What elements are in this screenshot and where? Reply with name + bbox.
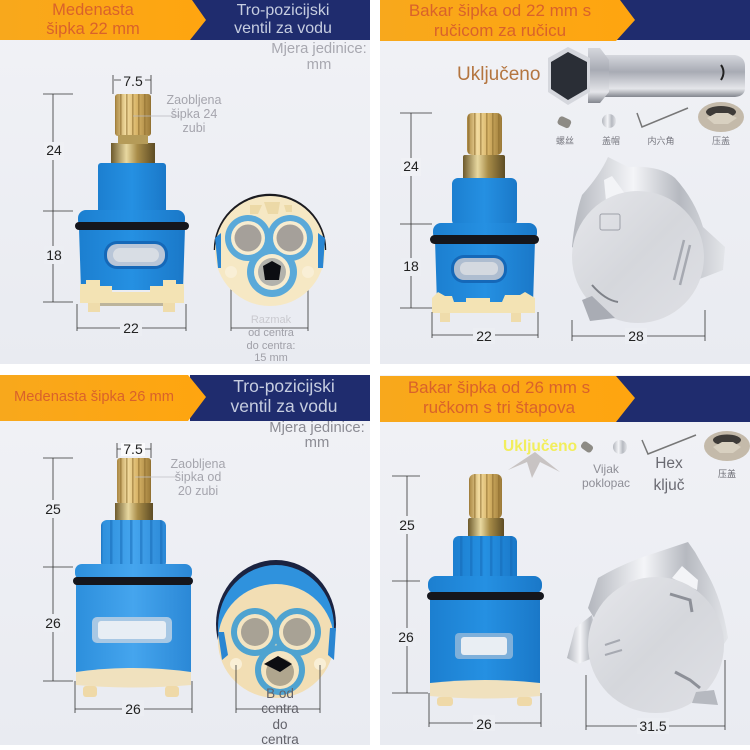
tooth note: Zaobljena	[167, 93, 221, 107]
panel: 22 mm with handle	[380, 0, 750, 364]
header banner: Medenasta šipka 26 mm	[14, 389, 174, 405]
unit note: mm	[307, 57, 331, 73]
dimension labels	[401, 158, 647, 344]
insect speck	[508, 452, 560, 478]
dimensions	[400, 113, 705, 341]
dimension labels: 25	[45, 501, 61, 517]
header banner: Bakar šipka od 26 mm s	[408, 378, 590, 397]
parts row: 压盖	[712, 135, 730, 146]
handle	[567, 542, 728, 713]
center distance note: do centra:	[247, 340, 295, 352]
header banner: ručicom za ručicu	[434, 21, 566, 40]
wrench	[548, 47, 745, 105]
valve bottom view	[215, 195, 325, 306]
center distance note: B od	[266, 686, 294, 701]
parts row: 内六角	[647, 135, 675, 146]
header banner: ventil za vodu	[230, 396, 338, 416]
dimension labels: 31.5	[639, 718, 667, 734]
tooth note: zubi	[183, 121, 205, 135]
dimension labels: 22	[476, 328, 492, 344]
valve cartridge	[430, 113, 539, 322]
header banner: Bakar šipka od 22 mm s	[409, 1, 591, 20]
tooth note: 20 zubi	[178, 484, 218, 498]
dimension labels: 28	[628, 328, 644, 344]
parts row	[580, 431, 750, 494]
dimensions	[43, 443, 320, 713]
dimension labels: 26	[476, 716, 492, 732]
panel: 22 mm three-position valve	[0, 0, 370, 364]
header banner: Tro-pozicijski	[233, 376, 335, 396]
dimension labels: 18	[403, 258, 419, 274]
tooth note: šipka od	[175, 470, 221, 484]
header banner	[0, 375, 370, 421]
header banner	[0, 0, 370, 40]
center distance note: Razmak	[251, 314, 292, 326]
parts row: poklopac	[582, 476, 630, 490]
dimension labels: 24	[46, 142, 62, 158]
parts row: 螺丝	[556, 135, 574, 146]
dimension labels: 26	[398, 629, 414, 645]
parts row: Vijak	[593, 462, 620, 476]
header banner: ventil za vodu	[234, 20, 332, 37]
center distance note: centra	[261, 732, 299, 747]
valve cartridge	[427, 474, 544, 706]
center distance note: do	[272, 717, 288, 732]
header banner: šipka 22 mm	[46, 20, 140, 38]
dimension labels	[396, 516, 669, 734]
header banner: ručkom s tri štapova	[423, 398, 576, 417]
center distance note: 15 mm	[254, 352, 288, 364]
header banner: Medenasta	[52, 1, 135, 19]
header banner: Tro-pozicijski	[237, 2, 329, 19]
panel: 26 mm with handle	[380, 375, 750, 745]
dimension labels: 26	[125, 701, 141, 717]
handle	[572, 157, 725, 323]
center distance note: centra	[261, 701, 299, 716]
header banner	[380, 0, 750, 41]
dimension labels: 7.5	[123, 73, 143, 89]
valve cartridge	[73, 458, 193, 697]
dimensions	[392, 476, 725, 730]
tooth note: šipka 24	[171, 107, 217, 121]
dimension labels	[44, 73, 145, 336]
dimension labels: 24	[403, 158, 419, 174]
header banner	[380, 376, 750, 422]
overlay label: Uključeno	[503, 438, 577, 455]
valve bottom view	[216, 560, 336, 698]
parts row	[556, 102, 744, 146]
parts row: Hex	[655, 455, 683, 472]
panel: 26 mm three-position valve	[0, 375, 370, 747]
center distance note: od centra	[248, 327, 295, 339]
unit note: Mjera jedinice:	[271, 41, 367, 57]
tooth note: Zaobljena	[171, 457, 225, 471]
dimension labels: 26	[45, 615, 61, 631]
parts row: 压盖	[718, 468, 736, 479]
parts row: 盖帽	[602, 135, 620, 146]
unit note: mm	[305, 435, 329, 451]
valve cartridge side view	[75, 94, 189, 312]
parts row: ključ	[653, 477, 685, 494]
dimension labels: 22	[123, 320, 139, 336]
dimension labels: 7.5	[123, 441, 143, 457]
dimensions	[43, 75, 308, 331]
dimension labels: 18	[46, 247, 62, 263]
overlay label: Uključeno	[457, 64, 540, 85]
dimension labels: 25	[399, 517, 415, 533]
dimension labels	[44, 441, 145, 717]
unit note: Mjera jedinice:	[269, 420, 365, 436]
